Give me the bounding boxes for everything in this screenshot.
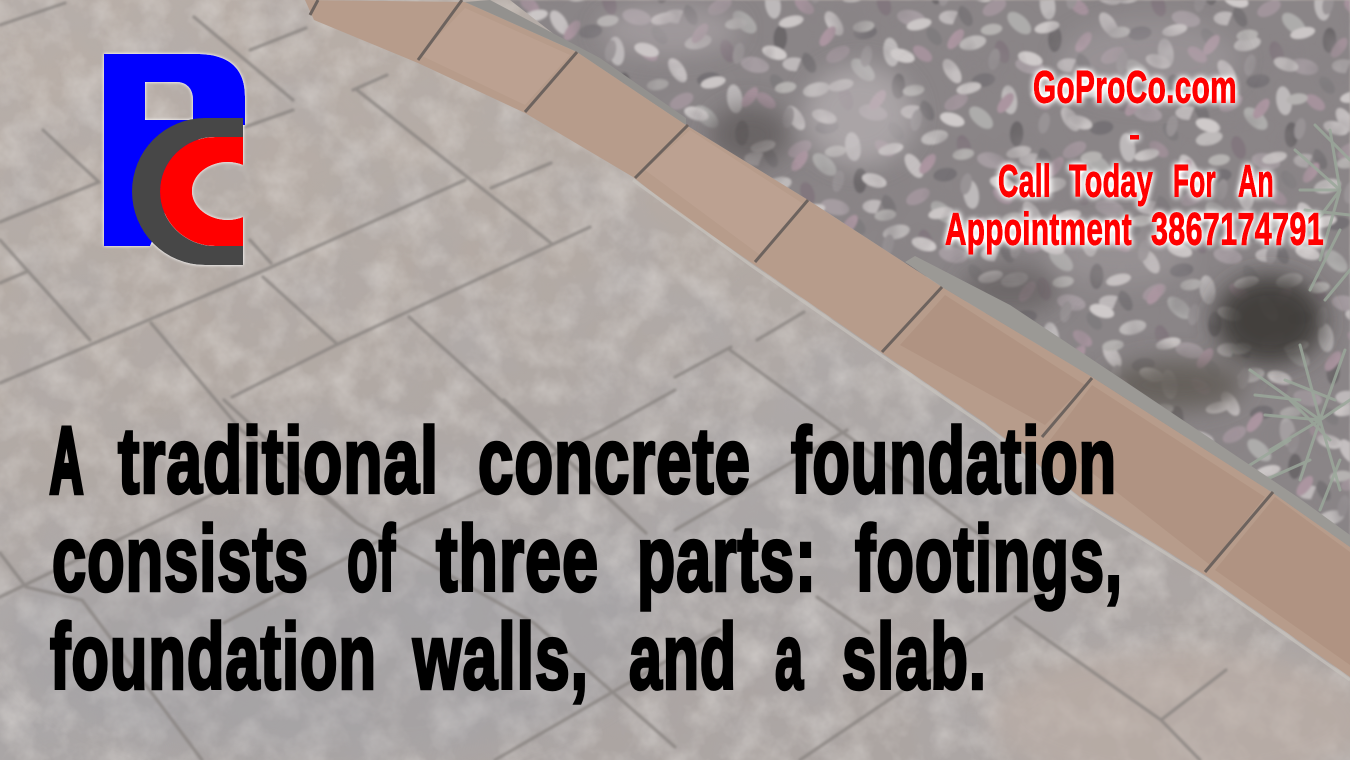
pale rough edge along curb xyxy=(633,180,1350,680)
logo letter P xyxy=(104,54,245,246)
contact callout xyxy=(945,62,1324,254)
line 1 xyxy=(50,408,1117,512)
call to action line: Call xyxy=(998,156,1051,206)
line 2 xyxy=(52,506,1123,610)
line 1: concrete xyxy=(478,408,751,512)
line 3: a xyxy=(775,604,804,708)
line 1: foundation xyxy=(791,408,1117,512)
phone line: Appointment xyxy=(945,204,1132,254)
curb tone variations xyxy=(900,295,1350,665)
line 2: parts: xyxy=(637,506,817,610)
line 3: slab. xyxy=(842,604,987,708)
line 1: A xyxy=(50,408,83,512)
line 2: of xyxy=(347,506,396,610)
main statement text xyxy=(50,408,1123,708)
line 3 xyxy=(50,604,987,708)
website: GoProCo.com xyxy=(1033,62,1237,112)
line 2: footings, xyxy=(855,506,1123,610)
logo letter C inner red xyxy=(160,137,243,246)
call to action line: For xyxy=(1173,156,1216,206)
line 2: consists xyxy=(52,506,309,610)
grey tint over lower paving xyxy=(10,520,650,760)
plants xyxy=(495,0,1350,550)
line 2: three xyxy=(436,506,599,610)
curb xyxy=(305,0,1350,677)
logo: blue P with grey and red C xyxy=(104,54,245,265)
warm tint lower right xyxy=(990,650,1350,760)
call to action line xyxy=(998,156,1274,206)
gutter strip xyxy=(905,256,1350,547)
line 3: walls, xyxy=(412,604,589,708)
call to action line: Today xyxy=(1069,156,1153,206)
logo letter C outer grey xyxy=(132,118,243,265)
line 1: traditional xyxy=(118,408,439,512)
ferns xyxy=(1250,125,1350,510)
dash separator xyxy=(1130,135,1139,140)
curb joints xyxy=(310,0,1273,572)
line 3: and xyxy=(629,604,737,708)
line 3: foundation xyxy=(50,604,377,708)
call to action line: An xyxy=(1238,156,1274,206)
